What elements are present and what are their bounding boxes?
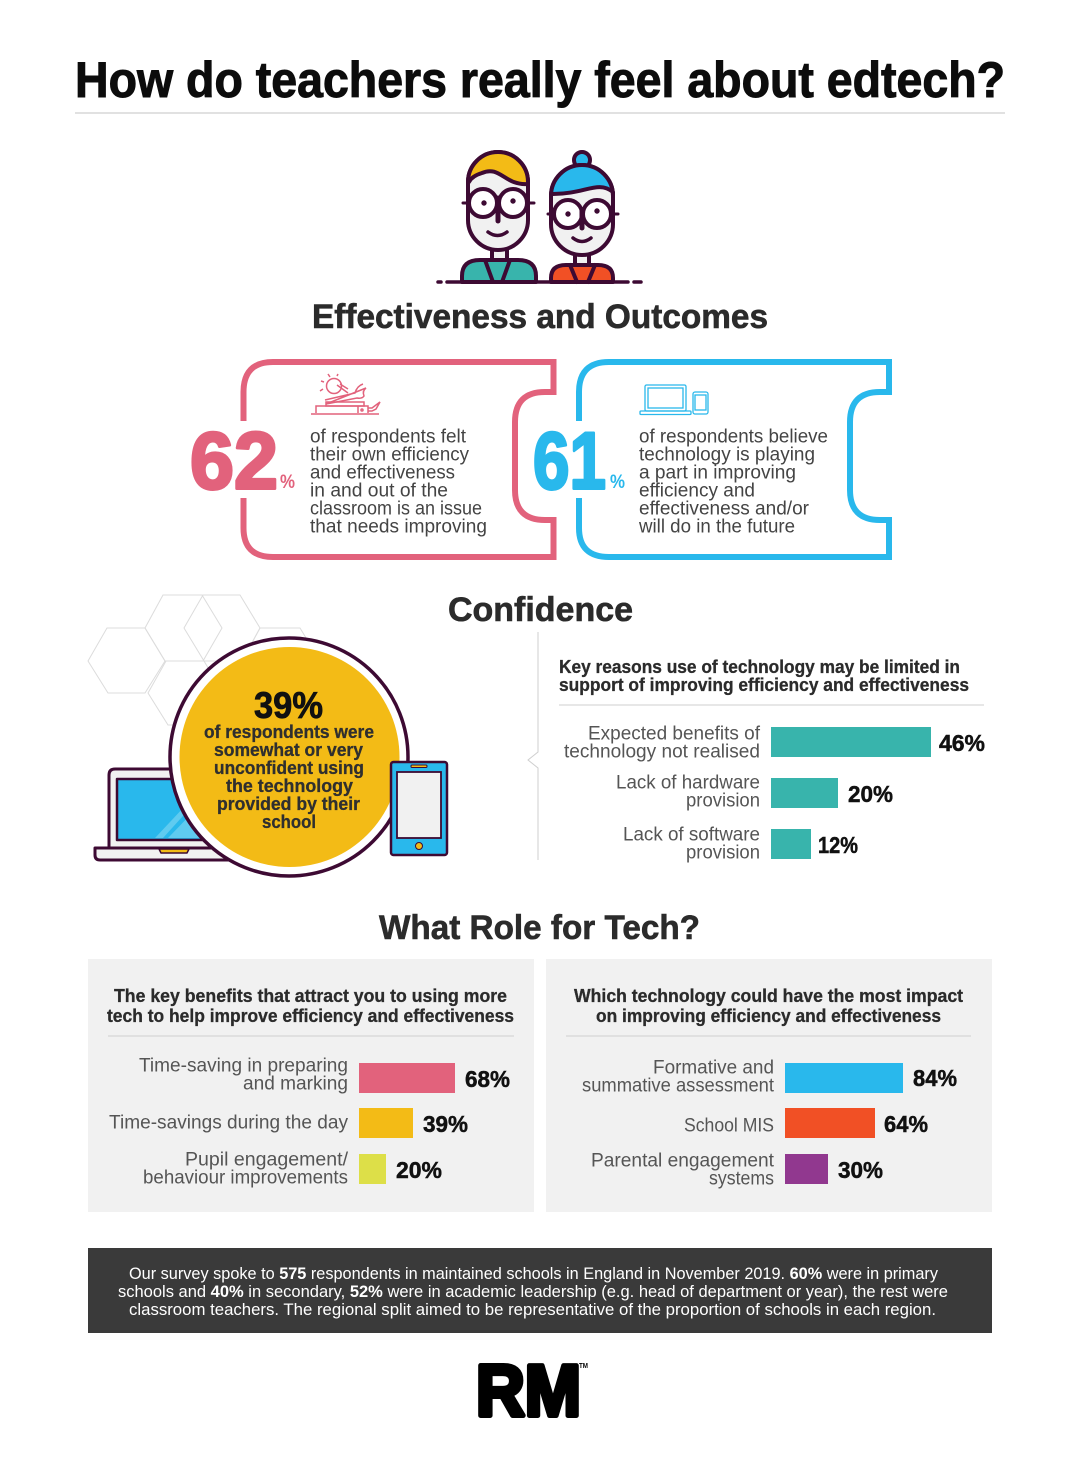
icon: laptop — [95, 769, 240, 860]
bar: hardware provision 20% — [616, 773, 893, 812]
text: 39 percent description: school — [262, 812, 316, 832]
text: 39 percent description: somewhat or very — [214, 740, 363, 760]
text: 39 percent description: of respondents were — [204, 722, 374, 742]
bar: preparing and marking 68%: 68% — [465, 1066, 510, 1092]
bar: benefits not realised 46%: Expected benefits of — [588, 724, 761, 745]
bar: preparing and marking 68%: Time-saving in preparing — [139, 1056, 348, 1077]
bar: during the day 39% — [109, 1108, 468, 1138]
footer: survey note: Our survey spoke to 575 respondents in maintained schools in England in November 2019. 60% were in primary — [129, 1265, 939, 1283]
panel heading: tech to help improve efficiency and effectiveness — [107, 1006, 514, 1026]
bar: assessment 84%: summative assessment — [582, 1076, 775, 1097]
footer: survey note — [88, 1248, 992, 1333]
bar: assessment 84%: 84% — [913, 1065, 957, 1091]
logo: RM: TM — [579, 1363, 588, 1370]
bar: parental engagement 30%: 30% — [838, 1157, 883, 1183]
bar: benefits not realised 46%: 46% — [939, 730, 985, 756]
chart: key reasons technology may be limited — [528, 632, 985, 864]
heading: confidence: Confidence — [448, 591, 633, 629]
text: 62 percent description — [310, 427, 487, 538]
bar: parental engagement 30%: Parental engagement — [591, 1151, 775, 1172]
text: 39 percent description: the technology — [226, 776, 353, 796]
icon: tablet — [391, 762, 447, 855]
bar: assessment 84%: Formative and — [653, 1058, 774, 1079]
bar: hardware provision 20%: Lack of hardware — [616, 773, 760, 794]
chart heading — [559, 657, 969, 695]
panel: technology with most impact — [546, 959, 992, 1212]
chart heading: Key reasons use of technology may be limited in — [559, 657, 960, 677]
bar: during the day 39%: 39% — [423, 1111, 468, 1137]
panel: 61 percent — [533, 362, 889, 557]
circle: yellow badge — [170, 638, 408, 876]
text: 39 percent description — [204, 722, 374, 832]
bar: hardware provision 20%: provision — [686, 791, 760, 812]
bar: school MIS 64%: 64% — [884, 1111, 928, 1137]
logo: RM: RM — [476, 1352, 581, 1432]
text: 62 percent description: their own efficiency — [310, 445, 469, 466]
panel heading: Which technology could have the most impact — [574, 986, 963, 1006]
stat: 62%: 62 — [190, 416, 278, 506]
text: 39 percent description: provided by their — [217, 794, 360, 814]
bar: pupil engagement 20% — [143, 1150, 442, 1189]
bar: preparing and marking 68%: and marking — [243, 1074, 348, 1095]
bar: software provision 12%: provision — [686, 843, 760, 864]
bar: parental engagement 30% — [591, 1151, 883, 1190]
stat: 61%: 61 — [533, 416, 606, 506]
panel heading: The key benefits that attract you to using more — [114, 986, 507, 1006]
panel: key benefits — [88, 959, 534, 1212]
stat: 61%: % — [610, 472, 625, 493]
bar: software provision 12% — [623, 825, 858, 864]
panel heading — [574, 986, 963, 1026]
bar: pupil engagement 20%: Pupil engagement/ — [185, 1150, 349, 1171]
bar: pupil engagement 20%: 20% — [396, 1157, 442, 1183]
text: 62 percent description: in and out of the — [310, 481, 448, 502]
bar: school MIS 64%: School MIS — [684, 1116, 774, 1137]
bar: preparing and marking 68% — [139, 1056, 510, 1095]
text: 61 percent description: technology is playing — [639, 445, 815, 466]
bar: during the day 39%: Time-savings during the day — [109, 1113, 348, 1134]
bar: hardware provision 20%: 20% — [848, 781, 893, 807]
bar: benefits not realised 46%: technology not realised — [564, 742, 760, 763]
bar: pupil engagement 20%: behaviour improvements — [143, 1168, 348, 1189]
stat: 62%: % — [280, 472, 295, 493]
man — [462, 152, 536, 282]
footer: survey note: classroom teachers. The regional split aimed to be representative of the proportion of schools in each region. — [129, 1301, 936, 1319]
icon: bulb, tools and book — [311, 374, 380, 414]
icon: laptop and phone — [640, 385, 708, 414]
panel heading: on improving efficiency and effectiveness — [596, 1006, 941, 1026]
text: 62 percent description: classroom is an issue — [310, 499, 482, 520]
bar: school MIS 64% — [684, 1108, 928, 1138]
bar: benefits not realised 46% — [564, 724, 985, 763]
text: 62 percent description: of respondents felt — [310, 427, 467, 448]
title: How do teachers really feel about edtech? — [75, 52, 1005, 108]
heading: effectiveness and outcomes: Effectiveness and Outcomes — [312, 298, 768, 336]
panel heading — [107, 986, 514, 1026]
illustration: hexagon pattern, devices and 39 percent circle — [88, 595, 447, 876]
text: 61 percent description: of respondents believe — [639, 427, 828, 448]
heading: what role for tech: What Role for Tech? — [379, 909, 700, 947]
text: 62 percent description: that needs improving — [310, 517, 487, 538]
panel: 62 percent — [190, 362, 554, 557]
stat: 39%: 39% — [254, 685, 323, 726]
woman — [548, 152, 618, 282]
text: 39 percent description: unconfident using — [214, 758, 364, 778]
chart heading: support of improving efficiency and effectiveness — [559, 675, 969, 695]
text: 61 percent description: efficiency and — [639, 481, 755, 502]
text: 61 percent description: a part in improving — [639, 463, 796, 484]
bar: software provision 12%: Lack of software — [623, 825, 760, 846]
text: 61 percent description — [638, 427, 828, 538]
text: 62 percent description: and effectiveness — [310, 463, 455, 484]
text: 61 percent description: effectiveness and/or — [639, 499, 810, 520]
bar: software provision 12%: 12% — [818, 832, 858, 858]
text: 61 percent description: will do in the future — [638, 517, 795, 538]
footer: survey note: schools and 40% in secondary, 52% were in academic leadership (e.g. head of department or year), the rest were — [118, 1283, 948, 1301]
illustration: two teachers — [438, 152, 641, 282]
bar: parental engagement 30%: systems — [709, 1169, 774, 1190]
bar: assessment 84% — [582, 1058, 957, 1097]
